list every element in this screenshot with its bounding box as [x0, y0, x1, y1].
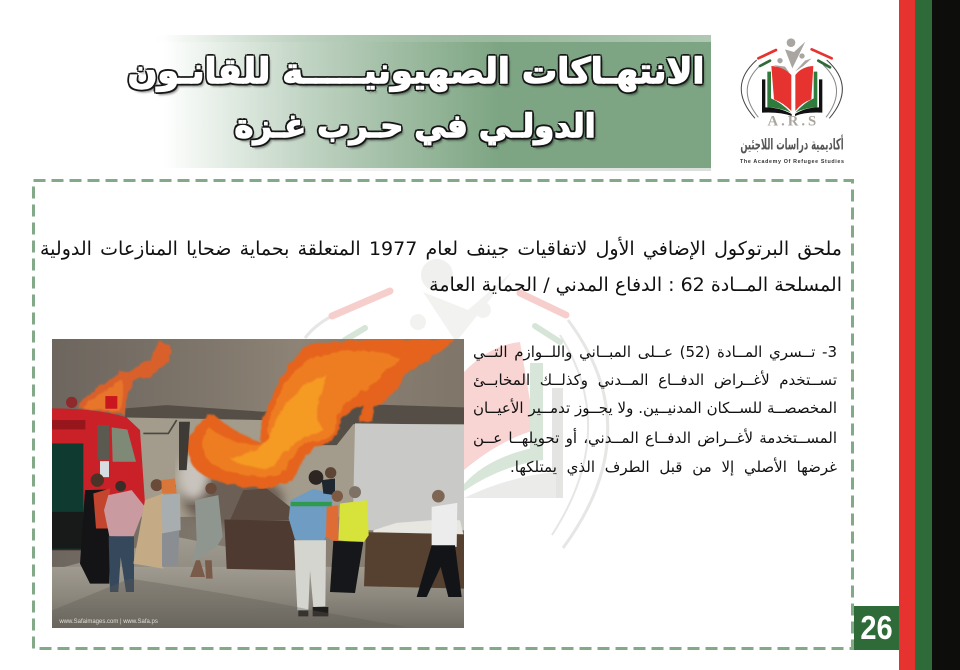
body line 1: 3- تــسري المــادة (52) عــلى المبــاني واللــوازم التــي	[473, 343, 837, 361]
people right	[289, 467, 462, 616]
green stripe	[915, 0, 932, 670]
logo arcs	[741, 60, 842, 118]
white sacks	[373, 520, 463, 534]
logo book	[762, 66, 822, 116]
heading line 2: المسلحة المــادة 62 : الدفاع المدني / الحماية العامة	[429, 274, 842, 296]
body line 2: تســتخدم لأغــراض الدفــاع المــدني وكذلــك المخابــئ	[473, 371, 837, 389]
dumpster right	[364, 532, 464, 589]
photo credit: www.Safaimages.com | www.Safa.ps	[58, 619, 158, 625]
dark dumpster-top debris	[230, 489, 293, 520]
dumpster centre	[224, 520, 297, 570]
pipe and column	[179, 422, 190, 470]
page number: 26	[860, 609, 893, 646]
body paragraph	[473, 343, 837, 476]
photo: fire and bystanders	[52, 339, 464, 628]
logo	[740, 38, 844, 165]
group of people left	[80, 473, 223, 592]
body line 3: المخصصــة للســكان المدنيــين. ولا يجــوز تدمــير الأعيــان	[473, 399, 837, 417]
page number box	[854, 606, 899, 650]
title line 2: الدولـي في حـرب غـزة	[234, 107, 596, 145]
logo figures	[773, 38, 812, 73]
title line 1: الانتهـاكات الصهيونيـــــة للقانـون	[128, 52, 704, 92]
title banner	[152, 35, 711, 168]
flames	[78, 339, 453, 488]
body line 4: المســتخدمة لأغــراض الدفــاع المــدني، أو تحويلهــا عــن	[473, 429, 837, 447]
road shadow streak	[52, 579, 407, 628]
white wall	[353, 423, 464, 530]
logo dashes	[758, 49, 832, 67]
fire truck	[52, 396, 145, 550]
side colour stripes	[899, 0, 960, 670]
smoke backdrop	[52, 339, 464, 628]
banner top highlight	[152, 35, 711, 42]
banner bottom shadow	[152, 168, 711, 171]
logo A.R.S: A.R.S	[768, 113, 819, 129]
logo english name: The Academy Of Refugee Studies	[740, 159, 844, 165]
dark wall band	[125, 403, 464, 445]
body line 5: غرضها الأصلي إلا من قبل الطرف الذي يمتلكها.	[510, 458, 837, 476]
heading line 1: ملحق البرتوكول الإضافي الأول لاتفاقيات جينف لعام 1977 المتعلقة بحماية ضحايا المنازعات الدولية	[40, 238, 842, 260]
building wall	[125, 417, 464, 517]
smoke haze	[183, 473, 283, 527]
red stripe	[899, 0, 915, 670]
road	[52, 537, 464, 628]
